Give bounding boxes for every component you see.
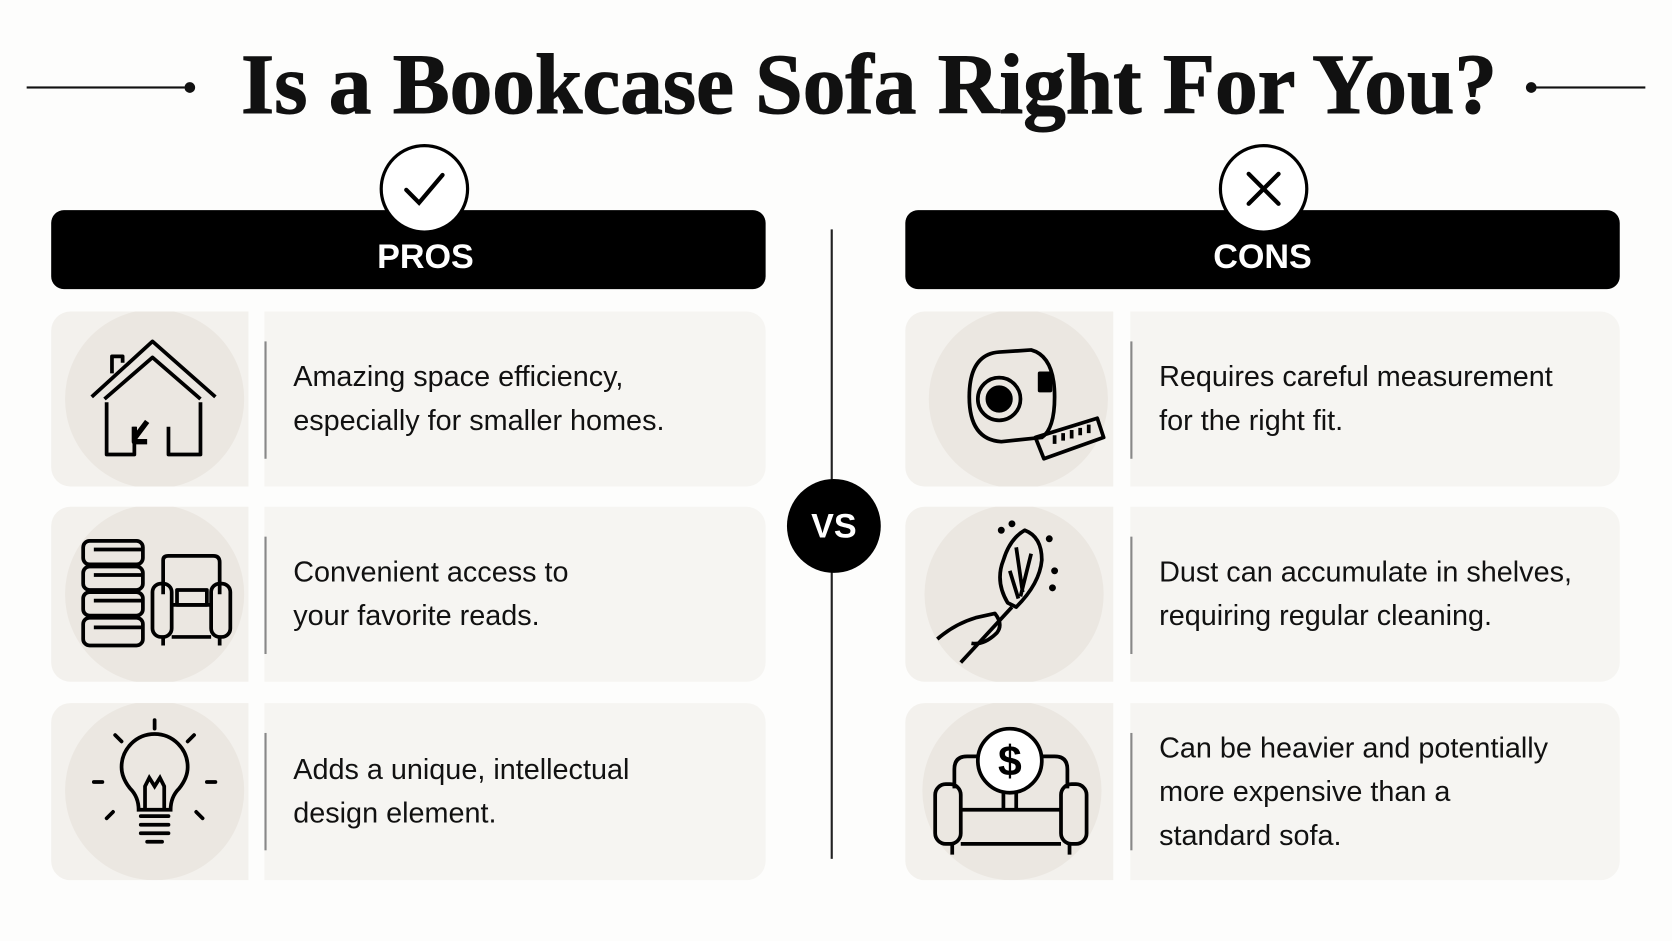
con card 1: [906, 312, 1620, 486]
cons header: CONS: [1213, 237, 1312, 275]
title: Is a Bookcase Sofa Right For You?: [241, 38, 1497, 132]
text: con 3: more expensive than a: [1159, 775, 1450, 807]
text: pro 2: your favorite reads.: [293, 600, 540, 632]
icon: feather duster: [905, 507, 1113, 682]
text: con 3: [1130, 703, 1620, 880]
divider line: [831, 229, 833, 859]
text: con 1: Requires careful measurement: [1159, 361, 1553, 393]
icon: light bulb: [51, 703, 248, 880]
con card 3: [906, 703, 1620, 880]
vs badge: VS: [811, 507, 857, 545]
text: pro 2: Convenient access to: [293, 556, 569, 588]
icon: house: [51, 312, 248, 487]
pros header: PROS: [377, 237, 474, 275]
pro card 3: [51, 703, 766, 880]
text: pro 1: [264, 312, 766, 487]
text: pro 2: [264, 507, 766, 682]
text: con 1: for the right fit.: [1159, 404, 1343, 436]
text: con 2: requiring regular cleaning.: [1159, 600, 1492, 632]
text: pro 3: [264, 703, 766, 880]
text: con 3: Can be heavier and potentially: [1159, 731, 1548, 763]
icon: sofa with dollar: [905, 703, 1113, 880]
cons header: [905, 210, 1620, 289]
text: pro 1: especially for smaller homes.: [293, 404, 664, 436]
icon: x circle: [1219, 144, 1308, 234]
pros header: [51, 210, 766, 289]
pro card 2: [51, 506, 766, 682]
icon: tape measure: [905, 312, 1113, 487]
vs badge: [787, 479, 881, 573]
icon: sofa with dollar: $: [998, 738, 1022, 786]
text: con 2: Dust can accumulate in shelves,: [1159, 556, 1572, 588]
text: con 3: standard sofa.: [1159, 819, 1342, 851]
text: pro 1: Amazing space efficiency,: [293, 361, 623, 393]
text: pro 3: Adds a unique, intellectual: [293, 753, 629, 785]
text: con 2: [1130, 507, 1620, 682]
text: pro 3: design element.: [293, 797, 497, 829]
icon: books and armchair: [51, 507, 248, 682]
icon: check circle: [380, 144, 469, 234]
pro card 1: [51, 312, 766, 486]
con card 2: [906, 506, 1620, 682]
text: con 1: [1130, 312, 1620, 487]
